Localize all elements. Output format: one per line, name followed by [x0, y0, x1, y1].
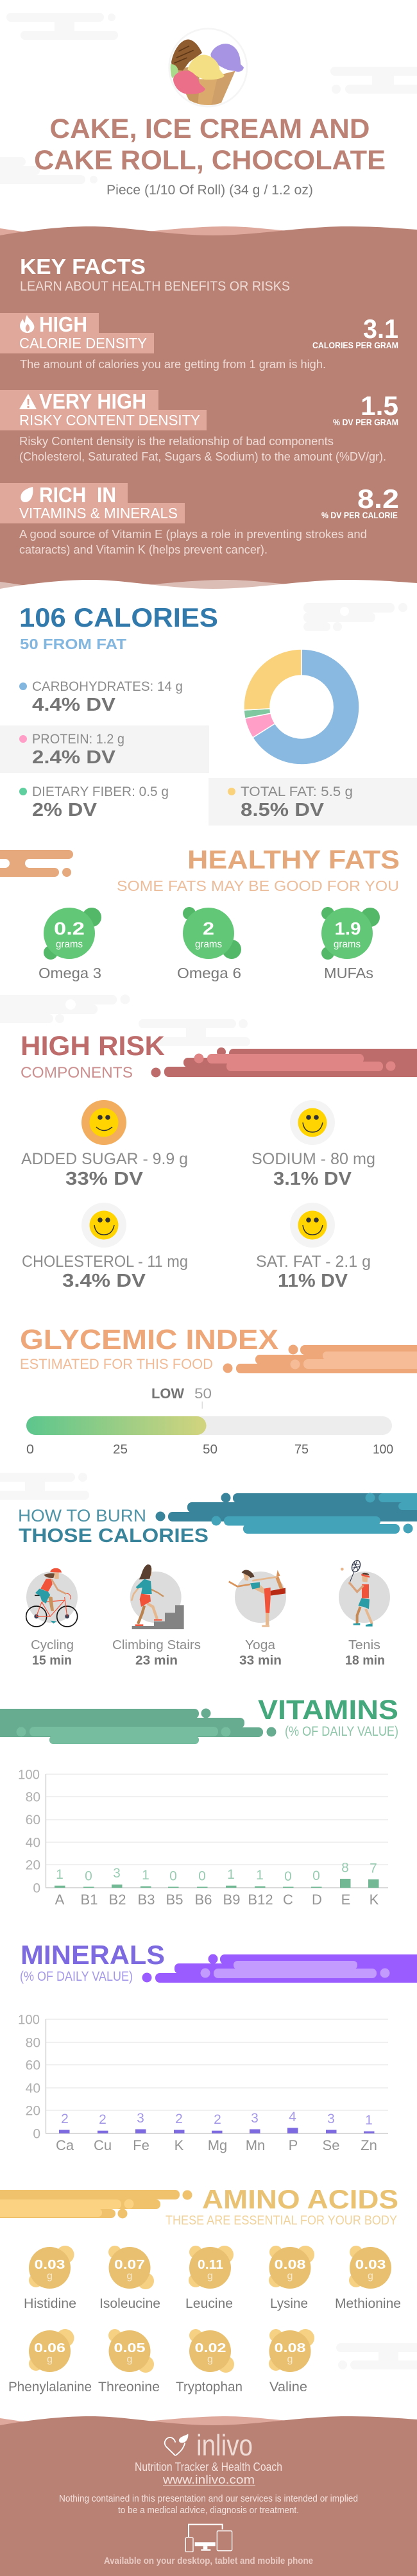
bar chart: vitamins: 8	[341, 1860, 349, 1876]
bar chart: vitamins: B3	[138, 1892, 155, 1908]
stat: histidine	[24, 2246, 76, 2311]
icon: warning triangle	[19, 394, 37, 409]
fact: very high risky content density	[0, 389, 398, 463]
bar chart: vitamins: 7	[370, 1861, 377, 1876]
heading: vitamins: (% OF DAILY VALUE)	[285, 1724, 398, 1739]
legend: carbohydrates	[19, 679, 183, 715]
stat: leucine: Leucine	[185, 2296, 233, 2311]
bar chart: minerals: 60	[26, 2058, 40, 2073]
heading: amino acids: THESE ARE ESSENTIAL FOR YOUR BODY	[166, 2214, 397, 2228]
icon: woman doing yoga	[229, 1570, 286, 1627]
heading: vitamins: VITAMINS	[258, 1695, 398, 1725]
bar chart: vitamins: 0	[85, 1869, 92, 1883]
tagline and site: Nutrition Tracker & Health Coach	[135, 2461, 282, 2473]
heading: calories: 50 FROM FAT	[20, 636, 126, 652]
glycemic index gauge: 0	[26, 1443, 34, 1457]
fact: very high risky content density: 1.5	[361, 391, 398, 421]
bar chart: vitamins: 0	[284, 1869, 292, 1884]
heading: how to burn those calories	[18, 1506, 208, 1546]
activity: cycling: 15 min	[32, 1654, 72, 1668]
heading: glycemic index	[20, 1324, 278, 1372]
glycemic index gauge: 100	[373, 1443, 393, 1457]
stat: histidine: 0.03	[35, 2258, 65, 2272]
glycemic index gauge: 25	[113, 1443, 128, 1457]
icon: inlivo heart logo	[165, 2434, 188, 2455]
stat: mufas	[321, 907, 380, 981]
bar chart: vitamins: 1	[227, 1867, 235, 1882]
stat: valine: g	[287, 2354, 293, 2365]
stat: tryptophan	[176, 2329, 243, 2394]
background cloud decoration: calories	[303, 603, 407, 631]
fact: very high risky content density: % DV PER GRAM	[333, 417, 398, 427]
bar chart: minerals: 20	[26, 2104, 40, 2118]
stat: phenylalanine: g	[47, 2354, 53, 2365]
legend: carbohydrates: CARBOHYDRATES: 14 g	[32, 679, 183, 694]
section banner: amino acids	[0, 2190, 192, 2218]
heading: calories	[19, 602, 218, 652]
bar chart: minerals: Mn	[246, 2137, 265, 2153]
fact: rich in vitamins and minerals	[0, 483, 399, 556]
tagline and site	[135, 2461, 282, 2486]
bar chart: minerals: Fe	[133, 2137, 149, 2153]
stat: mufas: 1.9	[335, 919, 361, 938]
stat: histidine: Histidine	[24, 2296, 76, 2311]
risk: cholesterol	[22, 1203, 188, 1291]
bar chart: minerals: Cu	[94, 2137, 112, 2153]
fact: rich in vitamins and minerals: A good source of Vitamin E (plays a role in preventing strokes and	[19, 528, 367, 541]
bar chart: minerals: 80	[26, 2036, 40, 2050]
stat: valine: 0.08	[275, 2341, 305, 2355]
stat: leucine: 0.11	[198, 2258, 223, 2272]
heading: glycemic index: GLYCEMIC INDEX	[20, 1324, 278, 1355]
background cloud decoration: amino	[336, 2343, 417, 2369]
bar chart: vitamins: B9	[223, 1892, 240, 1908]
heading: amino acids: AMINO ACIDS	[202, 2184, 398, 2214]
heading: calories: 106 CALORIES	[19, 602, 218, 632]
stat: valine	[269, 2329, 314, 2394]
risk: saturated fat	[256, 1203, 371, 1291]
icon: smiley	[90, 1211, 118, 1239]
risk: cholesterol: CHOLESTEROL - 11 mg	[22, 1253, 188, 1271]
bar chart: minerals: 2	[99, 2112, 106, 2127]
bar chart: vitamins: 0	[169, 1869, 177, 1883]
bar chart: vitamins: 0	[33, 1881, 40, 1896]
bar chart: vitamins: 3	[113, 1866, 121, 1881]
heading: minerals: (% OF DAILY VALUE)	[20, 1969, 133, 1984]
fact: high calorie density	[0, 312, 398, 371]
macronutrient legend panels	[0, 679, 417, 826]
risk: sodium	[251, 1100, 375, 1189]
section banner: burn calories	[155, 1493, 417, 1534]
fact: high calorie density: CALORIE DENSITY	[19, 335, 147, 352]
bar chart: vitamins	[18, 1768, 388, 1908]
icon: woman climbing stairs	[130, 1564, 184, 1629]
heading: healthy fats: HEALTHY FATS	[187, 845, 400, 874]
section banner: high risk	[151, 1047, 417, 1078]
heading: amino acids	[166, 2184, 398, 2228]
heading: how to burn those calories: HOW TO BURN	[18, 1506, 146, 1525]
icon: smiley	[90, 1108, 118, 1137]
bar chart: vitamins: C	[283, 1892, 293, 1908]
risk: added sugar: ADDED SUGAR - 9.9 g	[21, 1150, 188, 1168]
heading: minerals: MINERALS	[21, 1940, 165, 1970]
legend: carbohydrates: 4.4% DV	[32, 695, 116, 715]
food image: ice cream cones	[164, 29, 247, 106]
icon: tennis player	[339, 1559, 390, 1627]
title	[34, 114, 386, 176]
glycemic index gauge: 75	[294, 1443, 309, 1457]
fact: high calorie density: 3.1	[363, 314, 398, 344]
activity: yoga: 33 min	[239, 1654, 282, 1668]
bar chart: minerals: 40	[26, 2081, 40, 2096]
panel: key facts	[0, 226, 417, 600]
stat: leucine: g	[207, 2271, 213, 2282]
fact: rich in vitamins and minerals: 8.2	[357, 484, 399, 514]
icon: cyclist	[26, 1568, 78, 1627]
risk: added sugar: 33% DV	[65, 1169, 144, 1189]
heading: healthy fats: SOME FATS MAY BE GOOD FOR YOU	[117, 877, 399, 894]
donut chart	[244, 649, 359, 765]
stat: tryptophan: g	[207, 2354, 213, 2365]
bar chart: minerals: 2	[214, 2112, 221, 2127]
icon: leaf	[21, 487, 33, 502]
stat: lysine: g	[287, 2271, 293, 2282]
risk: sodium: 3.1% DV	[273, 1169, 352, 1189]
stat: threonine: 0.05	[114, 2341, 145, 2355]
section banner: vitamins	[0, 1709, 276, 1744]
bar chart: vitamins: B5	[166, 1892, 183, 1908]
risk: saturated fat: 11% DV	[278, 1271, 348, 1291]
disclaimer	[59, 2493, 358, 2516]
fact: rich in vitamins and minerals: % DV PER CALORIE	[321, 510, 398, 520]
footer panel	[0, 2416, 417, 2576]
risk: sodium: SODIUM - 80 mg	[251, 1150, 375, 1168]
bar chart: minerals: 3	[137, 2111, 144, 2126]
bar chart: minerals: 0	[33, 2127, 40, 2141]
stat: leucine	[185, 2246, 234, 2311]
stat: lysine: Lysine	[270, 2296, 308, 2311]
bar chart: vitamins: A	[55, 1892, 65, 1908]
stat: threonine: Threonine	[98, 2380, 160, 2394]
section banner: minerals	[142, 1954, 417, 1983]
disclaimer: to be a medical advice, diagnosis or treatment.	[118, 2505, 299, 2516]
bar chart: minerals: K	[174, 2137, 184, 2153]
stat: tryptophan: Tryptophan	[176, 2380, 243, 2394]
stat: omega 6: grams	[195, 939, 222, 950]
bar chart: vitamins: E	[341, 1892, 350, 1908]
fact: rich in vitamins and minerals: RICH IN	[39, 483, 116, 507]
bar chart: minerals: Ca	[56, 2137, 74, 2153]
stat: histidine: g	[47, 2271, 53, 2282]
fact: very high risky content density: VERY HIGH	[39, 389, 146, 413]
stat: omega 3: grams	[56, 939, 83, 950]
bar chart: vitamins: 1	[142, 1868, 149, 1883]
stat: mufas: grams	[334, 939, 361, 950]
legend: total fat: 8.5% DV	[241, 800, 325, 820]
risk: cholesterol: 3.4% DV	[62, 1271, 146, 1291]
title: CAKE, ICE CREAM AND	[50, 114, 370, 144]
background cloud decoration: burn	[0, 1473, 89, 1500]
bar chart: vitamins: 100	[18, 1768, 40, 1782]
stat: omega 3	[38, 908, 101, 981]
activity: climbing stairs: Climbing Stairs	[112, 1638, 201, 1652]
bar chart: minerals: Zn	[361, 2137, 377, 2153]
fact: high calorie density: The amount of calories you are getting from 1 gram is high.	[20, 358, 326, 371]
activity: tennis	[339, 1559, 390, 1668]
fact: very high risky content density: (Cholesterol, Saturated Fat, Sugars & Sodium) to the amount (%DV/gr).	[19, 450, 386, 463]
bar chart: vitamins: B12	[248, 1892, 273, 1908]
legend: protein	[19, 732, 124, 768]
legend: total fat: TOTAL FAT: 5.5 g	[241, 784, 353, 799]
bar chart: vitamins: K	[370, 1892, 379, 1908]
stat: mufas: MUFAs	[324, 965, 373, 981]
bar chart: vitamins: 60	[26, 1813, 40, 1827]
fact: high calorie density: HIGH	[39, 312, 87, 336]
bar chart: vitamins: 1	[56, 1867, 64, 1882]
heading: high risk components: COMPONENTS	[21, 1064, 133, 1081]
bar chart: minerals: Se	[323, 2137, 339, 2153]
stat: omega 3: Omega 3	[38, 965, 101, 981]
legend: dietary fiber	[19, 784, 169, 820]
bar chart: minerals: 1	[365, 2113, 373, 2128]
stat: omega 3: 0.2	[54, 919, 85, 938]
stat: isoleucine: Isoleucine	[99, 2296, 160, 2311]
activity: tennis: Tenis	[348, 1638, 380, 1652]
bar chart: minerals: 2	[61, 2112, 69, 2126]
bar chart: vitamins: B1	[81, 1892, 98, 1908]
fact: rich in vitamins and minerals: cataracts) and Vitamin K (helps prevent cancer).	[19, 543, 268, 556]
activity: climbing stairs: 23 min	[135, 1654, 178, 1668]
bar chart: minerals: Mg	[208, 2137, 227, 2153]
bar chart: minerals: 3	[251, 2111, 259, 2126]
stat: lysine	[269, 2246, 314, 2311]
stat: threonine: g	[127, 2354, 132, 2365]
risk: saturated fat: SAT. FAT - 2.1 g	[256, 1253, 371, 1271]
heading: high risk components	[21, 1031, 165, 1081]
activity: yoga: Yoga	[245, 1638, 276, 1652]
section banner: healthy fats	[0, 850, 73, 877]
legend: dietary fiber: DIETARY FIBER: 0.5 g	[32, 784, 169, 799]
disclaimer: Nothing contained in this presentation and our services is intended or implied	[59, 2493, 358, 2504]
activity: cycling	[26, 1568, 78, 1668]
bar chart: minerals: 3	[327, 2112, 335, 2126]
tagline and site: www.inlivo.com	[162, 2473, 255, 2486]
bar chart: vitamins: B2	[109, 1892, 126, 1908]
key facts heading: LEARN ABOUT HEALTH BENEFITS OR RISKS	[20, 279, 290, 294]
stat: methionine: 0.03	[355, 2258, 386, 2272]
bar chart: vitamins: 80	[26, 1790, 40, 1805]
heading: vitamins	[258, 1695, 398, 1739]
brand name: inlivo	[196, 2428, 253, 2462]
icon: flame	[20, 315, 34, 333]
icon: desktop, tablet and phone	[185, 2525, 232, 2552]
icon: smiley	[298, 1211, 327, 1239]
legend: total fat	[228, 784, 353, 820]
bar chart: minerals	[18, 2013, 388, 2153]
background cloud decoration: top	[0, 13, 417, 184]
section banner: glycemic index	[223, 1344, 417, 1373]
key facts heading: KEY FACTS	[20, 255, 146, 278]
stat: lysine: 0.08	[275, 2258, 305, 2272]
stat: isoleucine: g	[127, 2271, 132, 2282]
serving size subtitle: Piece (1/10 Of Roll) (34 g / 1.2 oz)	[106, 183, 313, 198]
stat: isoleucine: 0.07	[114, 2258, 145, 2272]
activity: yoga	[229, 1570, 286, 1668]
bar chart: vitamins: 0	[312, 1868, 320, 1883]
bar chart: vitamins: 40	[26, 1836, 40, 1850]
heading: high risk components: HIGH RISK	[21, 1031, 165, 1062]
glycemic index gauge: 50	[203, 1443, 217, 1457]
stat: omega 6: 2	[203, 919, 214, 938]
heading: glycemic index: ESTIMATED FOR THIS FOOD	[20, 1356, 213, 1372]
stat: methionine: g	[368, 2271, 373, 2282]
heading: how to burn those calories: THOSE CALORIES	[19, 1524, 208, 1546]
activity: cycling: Cycling	[31, 1638, 74, 1652]
stat: omega 6: Omega 6	[177, 965, 241, 981]
fact: rich in vitamins and minerals: VITAMINS & MINERALS	[19, 505, 178, 521]
icon: smiley	[298, 1108, 327, 1137]
activity: tennis: 18 min	[345, 1654, 385, 1668]
fact: very high risky content density: Risky Content density is the relationship of bad components	[19, 435, 334, 448]
background cloud decoration: high risk	[0, 994, 250, 1046]
bar chart: vitamins: 1	[256, 1868, 264, 1883]
stat: tryptophan: 0.02	[195, 2341, 226, 2355]
bar chart: minerals: P	[289, 2137, 298, 2153]
bar chart: minerals: 4	[289, 2110, 296, 2124]
stat: isoleucine	[99, 2246, 160, 2311]
stat: methionine	[335, 2246, 401, 2311]
bar chart: vitamins: B6	[195, 1892, 212, 1908]
bar chart: vitamins: 20	[26, 1858, 40, 1873]
stat: phenylalanine	[8, 2329, 92, 2394]
bar chart: minerals: 100	[18, 2013, 40, 2027]
legend: protein: 2.4% DV	[32, 747, 116, 768]
glycemic index gauge: LOW	[151, 1385, 184, 1402]
heading: healthy fats	[117, 845, 400, 894]
stat: phenylalanine: 0.06	[34, 2341, 65, 2355]
legend: protein: PROTEIN: 1.2 g	[32, 732, 124, 747]
stat: phenylalanine: Phenylalanine	[8, 2380, 92, 2394]
stat: omega 6	[177, 907, 241, 981]
stat: threonine	[98, 2329, 160, 2394]
key facts heading	[20, 255, 290, 294]
bar chart: minerals: 2	[175, 2112, 183, 2126]
glycemic index gauge: 50	[194, 1385, 212, 1402]
risk: added sugar	[21, 1100, 188, 1189]
fact: very high risky content density: RISKY CONTENT DENSITY	[19, 412, 200, 428]
bottom wave of key facts panel	[0, 580, 417, 600]
title: CAKE ROLL, CHOCOLATE	[34, 145, 386, 176]
bar chart: vitamins: 0	[198, 1869, 206, 1883]
glycemic index gauge	[26, 1385, 393, 1457]
stat: valine: Valine	[269, 2380, 307, 2394]
availability note: Available on your desktop, tablet and mobile phone	[104, 2555, 313, 2566]
activity: climbing stairs	[112, 1564, 201, 1668]
fact: high calorie density: CALORIES PER GRAM	[312, 340, 398, 350]
legend: dietary fiber: 2% DV	[32, 800, 98, 820]
stat: methionine: Methionine	[335, 2296, 401, 2311]
heading: minerals	[20, 1940, 165, 1984]
bar chart: vitamins: D	[312, 1892, 322, 1908]
